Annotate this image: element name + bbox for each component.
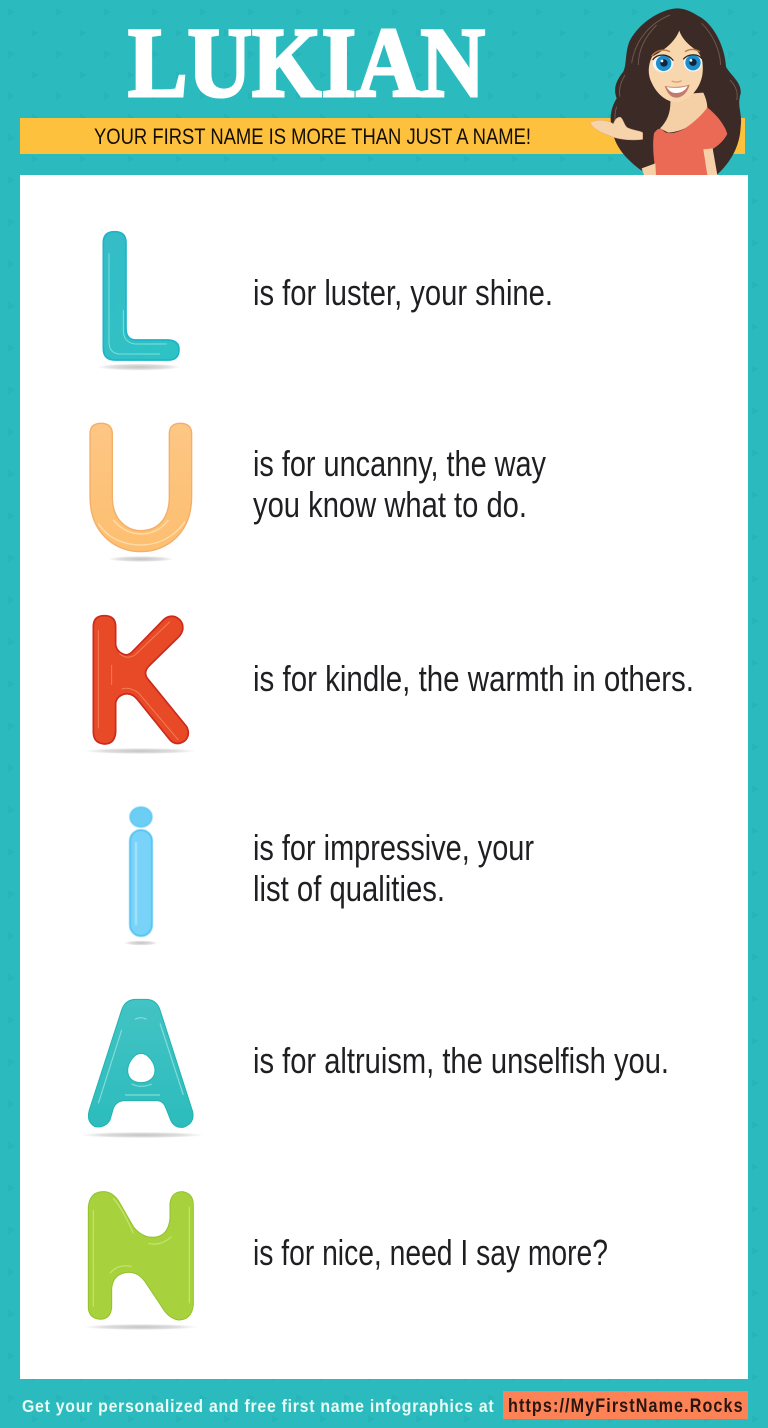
hair [611, 8, 741, 175]
nose [672, 81, 682, 82]
hair highlights [614, 14, 738, 120]
white content panel [20, 175, 748, 1379]
icon: letter i [124, 807, 158, 946]
letter U row [90, 423, 546, 562]
neck and chest [660, 93, 707, 133]
shirt [653, 107, 727, 175]
right arm [703, 148, 717, 175]
woman illustration [590, 8, 741, 175]
text: i: list of qualities. [253, 868, 445, 909]
face [649, 31, 703, 102]
text: i [253, 827, 534, 909]
text: U: is for uncanny, the way [253, 443, 546, 484]
icon: letter N [84, 1192, 198, 1330]
letter L row [97, 232, 553, 370]
tagline text: YOUR FIRST NAME IS MORE THAN JUST A NAME! [94, 124, 531, 149]
footer [22, 1391, 748, 1419]
icon: letter L [97, 232, 181, 370]
text: i: is for impressive, your [253, 827, 534, 868]
eyes [653, 54, 702, 72]
left lower arm [642, 163, 656, 175]
url badge: https://MyFirstName.Rocks [508, 1395, 743, 1416]
text: U: you know what to do. [253, 484, 527, 525]
icon: letter U [90, 423, 192, 562]
text: U [253, 443, 546, 525]
text: N: is for nice, need I say more? [253, 1232, 608, 1273]
title: LUKIAN [128, 7, 485, 118]
letter A row [80, 999, 669, 1138]
text: L: is for luster, your shine. [253, 272, 553, 313]
yellow tagline banner [20, 118, 745, 154]
icon: letter K [84, 616, 196, 754]
eyebrows [652, 49, 700, 56]
footer call to action: Get your personalized and free first name infographics at [22, 1396, 494, 1416]
letter K row [84, 616, 694, 754]
letter I row [124, 807, 534, 946]
icon: letter A [80, 999, 204, 1138]
letter N row [84, 1192, 608, 1330]
hand [590, 117, 643, 140]
text: A: is for altruism, the unselfish you. [253, 1040, 669, 1081]
mouth [665, 85, 690, 98]
